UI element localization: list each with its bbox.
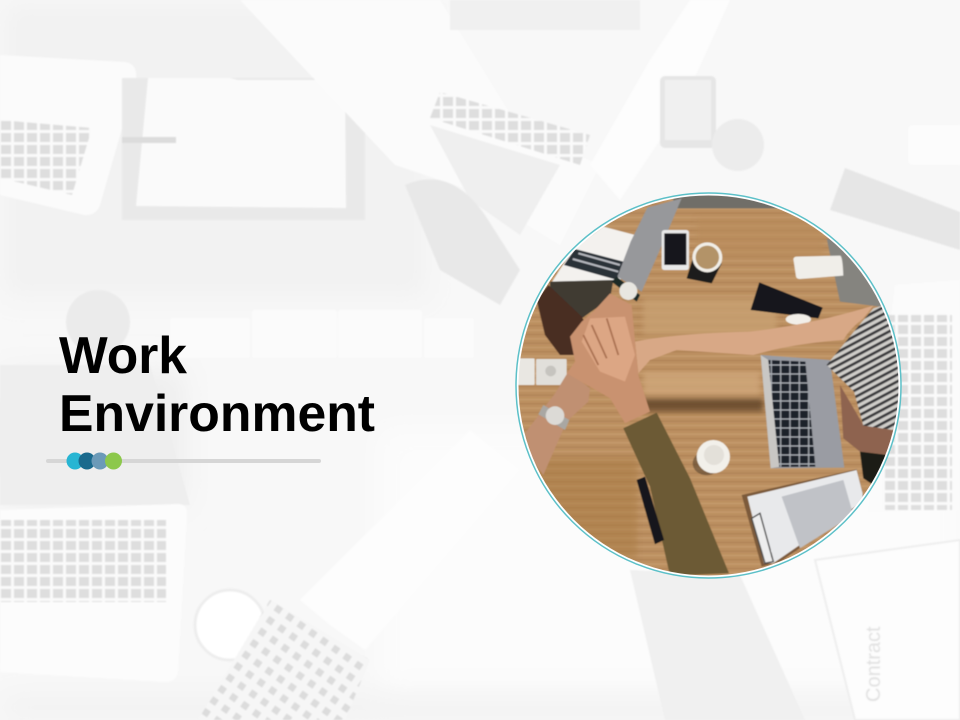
grey sleeve [617, 198, 682, 292]
title [59, 326, 375, 442]
background top strip [450, 0, 640, 30]
background laptop bottom left [0, 504, 187, 682]
stacked hands [567, 293, 650, 423]
wrist watch top [612, 277, 640, 302]
circular photo with teal ring [510, 185, 910, 585]
background power strip [170, 310, 474, 358]
title: Environment [59, 384, 375, 442]
coffee cup bottom [693, 440, 730, 475]
black phone bottom [637, 477, 664, 544]
background ball [66, 290, 130, 354]
background contract: Contract [863, 626, 885, 702]
background arm top [240, 0, 600, 245]
background cup bottom [195, 590, 265, 660]
background checked sleeve [198, 600, 370, 720]
coffee cup top [687, 242, 722, 283]
power socket [517, 358, 567, 385]
decorative divider with four dots [46, 452, 321, 470]
background keyboard top centre [430, 92, 590, 235]
left arm [525, 372, 590, 475]
clipboard [742, 469, 863, 567]
wooden table [518, 198, 894, 576]
background laptop top left [0, 55, 136, 215]
striped shirt [827, 303, 902, 431]
black case [751, 282, 823, 318]
background right objects [830, 125, 960, 250]
dark hand [537, 284, 584, 356]
background dark laptop [0, 365, 190, 505]
wrist watch left [538, 405, 569, 430]
background laptop right [868, 280, 960, 512]
laptop top left [550, 227, 635, 318]
phone [662, 230, 689, 270]
brown sleeve [623, 413, 729, 576]
background notebook [122, 78, 365, 220]
right person's skin [840, 386, 893, 456]
white cup lid [786, 314, 811, 325]
right laptop [761, 355, 844, 468]
concrete floor [672, 196, 881, 307]
background hands [405, 179, 520, 305]
background contract [815, 540, 960, 720]
background forearm centre [300, 430, 520, 650]
dark floor shadow [860, 452, 888, 485]
outstretched arm [635, 306, 873, 373]
background sleeve bottom [630, 570, 805, 720]
background phone and cup [660, 76, 764, 171]
title: Work [59, 326, 187, 384]
background sleeve top [590, 0, 730, 200]
white power bank [793, 256, 843, 279]
